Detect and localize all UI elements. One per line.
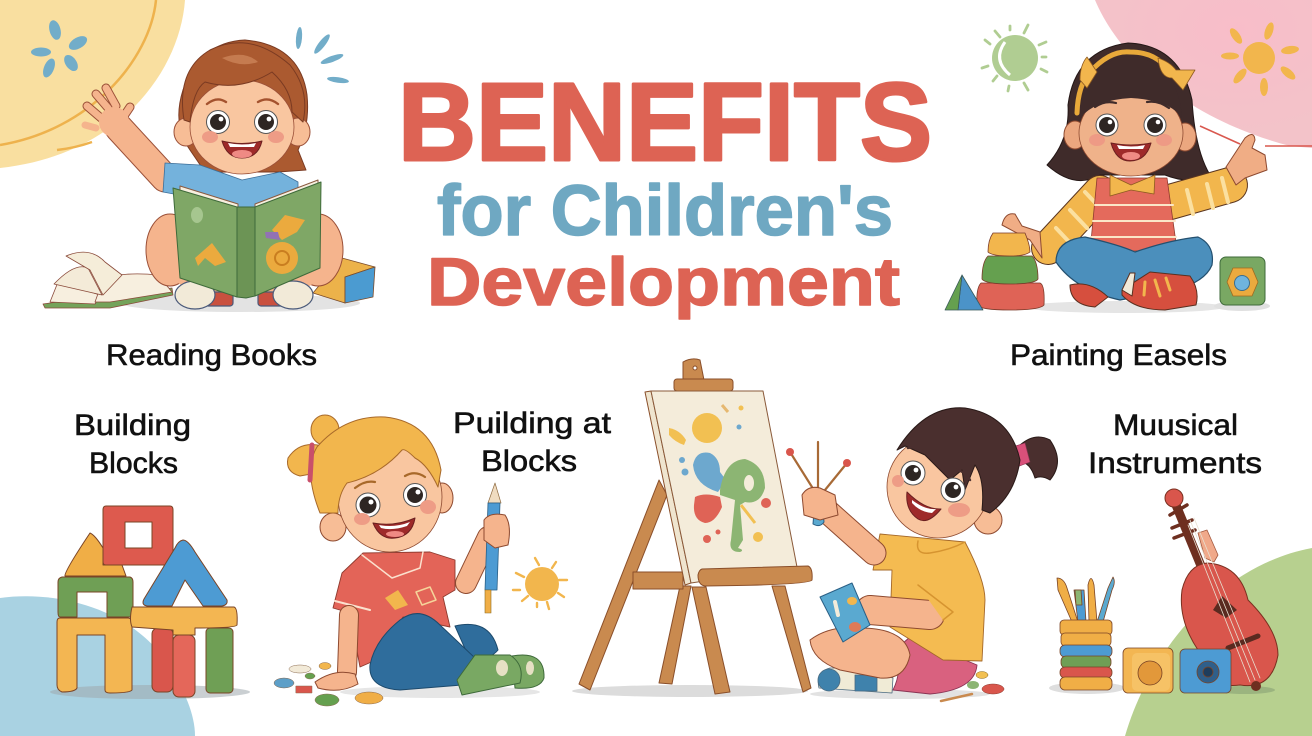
label: Muusical Instruments: Instruments [1088, 447, 1262, 480]
icon: small orange sun [513, 558, 567, 609]
triangle toy [945, 275, 983, 310]
icon: orange sun [1221, 21, 1299, 96]
paint sticks [786, 442, 851, 526]
jeans [1056, 237, 1212, 300]
shadow [1025, 301, 1225, 313]
illustration: child reading a book [43, 40, 375, 312]
stacking rings [977, 233, 1044, 310]
sleeves [1048, 178, 1230, 248]
background blob: yellow top-left [0, 0, 185, 168]
shirt [873, 534, 985, 661]
shorts [893, 637, 977, 694]
orange triangle [65, 533, 126, 576]
shoes [175, 281, 313, 309]
hands [1002, 134, 1267, 258]
yellow cube [1123, 648, 1173, 693]
label: Building Blocks [74, 409, 191, 480]
cup bands [1060, 620, 1112, 690]
shadow [340, 686, 540, 698]
shadow [50, 685, 250, 699]
heading: for Children's: for Children's [437, 172, 893, 251]
yellow arch [57, 618, 132, 693]
green toy cube [1220, 257, 1265, 305]
face [174, 43, 310, 174]
hand on brush [484, 514, 509, 548]
hand [802, 487, 838, 520]
craft pieces [274, 662, 383, 706]
shadow [120, 294, 360, 312]
canvas [645, 391, 797, 585]
heading: Development: Development [427, 244, 900, 320]
easel shelf [698, 566, 812, 586]
background blob: blue bottom-left [0, 596, 195, 736]
label: Painting Easels: Painting Easels [1010, 339, 1227, 372]
green arch [58, 577, 133, 617]
icon: blue flower petals [31, 19, 89, 79]
easel top [674, 359, 733, 391]
card [820, 583, 870, 642]
illustration: painting easel [572, 359, 812, 697]
raised arm [466, 537, 488, 583]
striped vest [1090, 175, 1177, 252]
label: Building Blocks: Building [74, 409, 191, 442]
green shoes [457, 655, 544, 695]
sound hole and bridge [1213, 596, 1237, 618]
illustration: child painting [786, 408, 1058, 701]
lower arm [870, 610, 930, 615]
face [310, 417, 453, 552]
easel legs [579, 480, 811, 694]
ground shadow and paint bits [810, 672, 1004, 701]
red legs [152, 628, 173, 692]
paintbrush [485, 483, 501, 613]
open book on floor [43, 252, 173, 308]
pencils [1057, 577, 1114, 622]
illustration: girl with stacking toys [945, 43, 1270, 313]
shirt [163, 163, 298, 215]
yellow T block [130, 607, 237, 635]
red shoes [1070, 272, 1197, 310]
label: Building Blocks: Blocks [89, 447, 178, 480]
illustration: building blocks [50, 506, 250, 699]
background blob: green bottom-right [1125, 548, 1312, 736]
support arm [347, 615, 349, 672]
title [398, 61, 932, 320]
shirt details [335, 552, 436, 610]
hair back [1047, 43, 1210, 181]
illustration: violin [1165, 489, 1278, 694]
illustration: toy cubes [1123, 648, 1231, 693]
paint splashes [669, 405, 771, 552]
illustration: blonde child with paintbrush [274, 415, 544, 706]
pigtail [1012, 437, 1058, 480]
blue triangle arch [143, 540, 227, 606]
neck and scroll [1165, 489, 1206, 578]
labels row one [106, 339, 1227, 372]
jeans front leg [370, 614, 475, 690]
green book [173, 180, 321, 298]
illustration: pencil cup [1049, 577, 1125, 694]
icon: green sun [982, 25, 1047, 91]
label: Muusical Instruments [1088, 409, 1262, 480]
icon: blue sparkle dashes [295, 27, 349, 84]
background blob: pink top-right [1095, 0, 1312, 148]
blue cube [1180, 649, 1231, 693]
label: Muusical Instruments: Muusical [1113, 409, 1238, 442]
green leg [206, 628, 233, 693]
block [313, 258, 375, 303]
face [887, 408, 1020, 538]
waving arm and hand [85, 88, 165, 178]
legs [146, 214, 343, 295]
label: Puilding at Blocks: Puilding at [453, 407, 612, 440]
shirt [333, 552, 455, 667]
label: Reading Books: Reading Books [106, 339, 317, 372]
face [1064, 52, 1196, 176]
bun and hair back [288, 415, 339, 476]
label: Puilding at Blocks: Blocks [481, 445, 577, 478]
jeans back leg [455, 624, 498, 660]
shoe [818, 668, 893, 693]
red square block [103, 506, 173, 565]
heading: BENEFITS: BENEFITS [398, 61, 932, 184]
leg [810, 628, 910, 678]
hair back [179, 40, 308, 172]
raised arm [828, 512, 874, 553]
body [1181, 563, 1278, 686]
hand holding neck [1198, 530, 1218, 562]
ground shadow [572, 685, 808, 697]
label: Puilding at Blocks [453, 407, 612, 478]
